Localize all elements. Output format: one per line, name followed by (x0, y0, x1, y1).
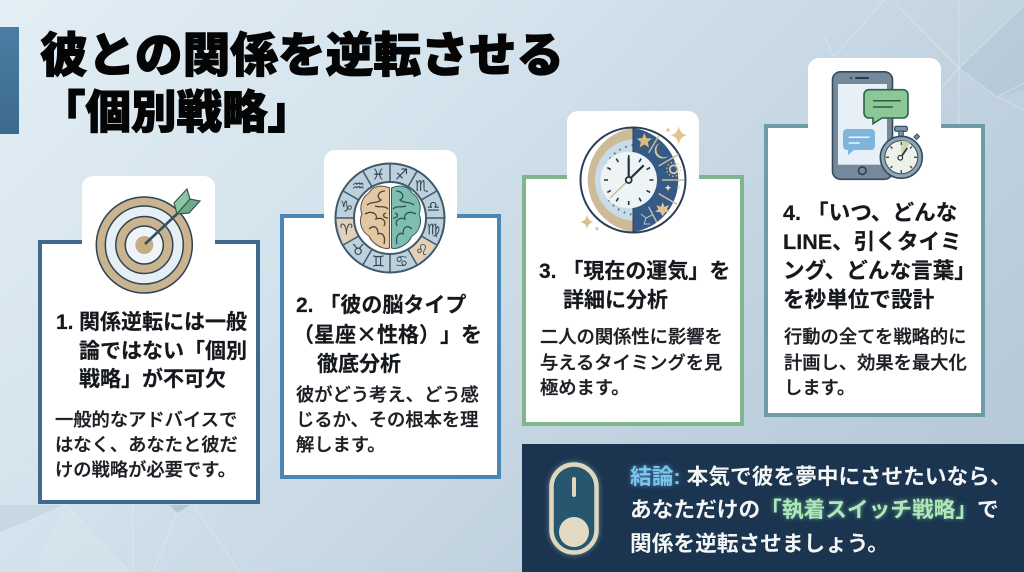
heading: card 1: 戦略」が不可欠 (79, 368, 226, 391)
icon: brain in zodiac wheel: ♒ (351, 177, 365, 195)
icon: half clock half night sky (580, 126, 687, 234)
heading: card 1: 関係逆転には一般 (79, 311, 247, 334)
heading: card 1 (56, 310, 247, 391)
text: card 1 body: はなく、あなたと彼だ (55, 434, 238, 455)
heading: card 4: 4. 「いつ、どんな (783, 200, 957, 225)
text: card 3 body: 極めます。 (540, 377, 630, 398)
icon: brain in zodiac wheel: ♌ (415, 241, 429, 259)
heading: card 1: 1. (56, 311, 74, 334)
title (40, 30, 564, 138)
text: card 1 body: 一般的なアドバイスで (55, 409, 237, 430)
panel: card 4 (764, 58, 985, 417)
icon: brain in zodiac wheel: ♋ (395, 252, 408, 270)
icon: brain in zodiac wheel: ♎ (427, 197, 440, 215)
text: card 3 body: 与えるタイミングを見 (540, 352, 722, 372)
text: card 2 body: 彼がどう考え、どう感 (296, 384, 479, 405)
text: card 3 body: 二人の関係性に影響を (540, 326, 723, 347)
heading: card 2: （星座×性格）」を (293, 319, 482, 349)
text: card 1 body (55, 409, 238, 480)
heading: card 4: LINE、引くタイミ (783, 229, 962, 254)
heading: card 3: 3. 「現在の運気」を (539, 260, 730, 283)
text: card 1 body: けの戦略が必要です。 (55, 459, 236, 480)
text: conclusion (628, 463, 1012, 556)
icon: brain in zodiac wheel: ♏ (415, 177, 429, 195)
panel: card 3 (522, 111, 744, 426)
icon: brain in zodiac wheel: ♈ (340, 221, 353, 239)
panel: card 2 (280, 150, 501, 479)
text: card 4 body (784, 326, 967, 398)
icon: brain in zodiac wheel: ♊ (372, 252, 385, 270)
callout: conclusion (522, 444, 1024, 572)
icon: brain in zodiac wheel: ♍ (427, 221, 440, 239)
icon: glowing switch (546, 459, 602, 558)
heading: card 4: を秒単位で設計 (783, 287, 934, 312)
icon: phone with chat bubbles and stopwatch (832, 71, 924, 180)
text: card 4 body: 行動の全てを戦略的に (784, 326, 966, 347)
text: conclusion: あなただけの「執着スイッチ戦略」で (630, 497, 999, 522)
icon: brain in zodiac wheel: ♓ (372, 166, 385, 184)
heading: card 2: 2. 「彼の脳タイプ (296, 294, 466, 317)
heading: card 4: ング、どんな言葉」 (783, 258, 976, 283)
icon: brain in zodiac wheel: ♑ (340, 197, 353, 215)
text: card 3 body (540, 326, 723, 398)
text: card 4 body: 計画し、効果を最大化 (784, 352, 967, 372)
text: card 4 body: します。 (784, 377, 855, 398)
text: card 2 body: じるか、その根本を理 (296, 409, 478, 430)
icon: brain in zodiac wheel: ♐ (395, 166, 408, 184)
panel: card 1 (38, 176, 260, 504)
heading: card 2: 徹底分析 (317, 353, 401, 376)
heading: card 1: 論ではない「個別 (79, 340, 247, 362)
title: 「個別戦略」 (40, 87, 313, 138)
left accent bar (0, 27, 19, 134)
text: card 2 body (296, 384, 479, 455)
text: conclusion: 結論: 本気で彼を夢中にさせたいなら、 (630, 464, 1012, 488)
text: conclusion: 関係を逆転させましょう。 (630, 530, 889, 556)
heading: card 3: 詳細に分析 (563, 288, 668, 312)
heading: card 4 (783, 200, 976, 312)
icon: target with arrow (96, 188, 202, 294)
title: 彼との関係を逆転させる (40, 30, 564, 83)
text: card 2 body: 解します。 (296, 434, 386, 455)
heading: card 2 (293, 294, 482, 376)
icon: brain in zodiac wheel: ♉ (351, 241, 365, 259)
icon: brain in zodiac wheel (334, 162, 446, 274)
heading: card 3 (539, 260, 730, 312)
